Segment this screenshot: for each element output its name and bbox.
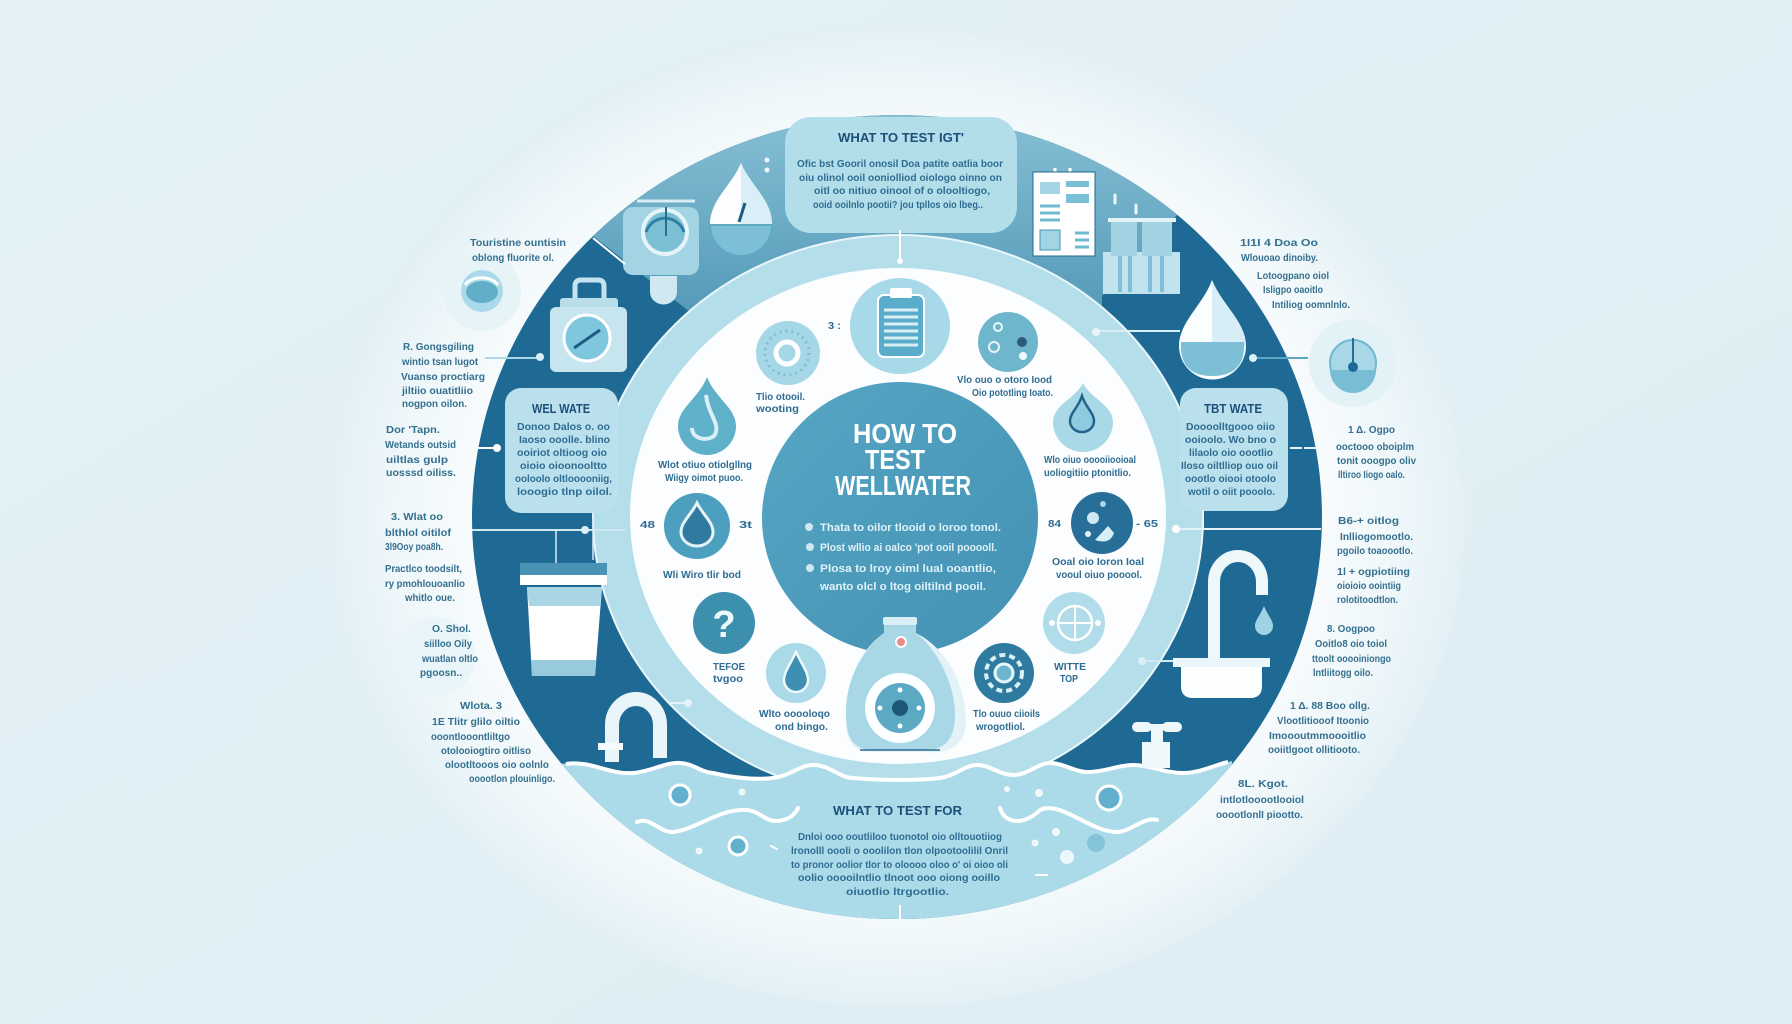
callout: uosssd oiliss. [386,467,456,479]
callout [1337,515,1413,606]
label: wrogotliol. [975,721,1025,733]
callout: intlotlooootlooiol [1220,794,1304,806]
callout: olootltooos oio oolnlo [445,759,549,771]
icon: large water drop [1179,280,1246,379]
connector right 4 [1172,510,1321,533]
connector [899,905,901,920]
label [713,661,745,685]
callout: Isligpo oaoitlo [1263,284,1323,296]
label: WITTE [1054,661,1086,673]
callout: pgoilo toaoootlo. [1337,545,1413,557]
icon: question circle [693,592,755,654]
connector left 3 [472,513,625,565]
callout [385,511,465,604]
label: Wlo oiuo ooooiiooioal [1044,454,1136,466]
labels [1048,518,1158,530]
callout: Touristine ountisin [470,237,566,249]
label [1044,454,1136,479]
text block: ooid ooilnlo pootii? jou tpllos oio lbeg.. [813,199,983,211]
label: vooul oiuo pooool. [1056,569,1142,581]
icon: virus circle [974,643,1034,703]
label: Oio pototling Ioato. [972,387,1053,399]
outer ring [472,100,1322,919]
callout: lntliitogg oilo. [1313,667,1373,679]
callout with halo: siilloo Oily [424,638,472,650]
labels: 3t [739,519,753,531]
heading: WHAT TO TEST FOR [833,804,962,818]
callout: ooootlon plouinligo. [469,773,555,785]
icon: particles circle [978,312,1038,372]
icon: report document [1033,168,1095,256]
text block: lilaolo oio oootlio [1189,447,1273,459]
text block: Iloso oiltlliop ouo oil [1181,460,1278,472]
callout [1268,700,1370,756]
icon: swirl drop [678,377,736,455]
text block: Dnloi ooo ooutliloo tuonotol oio olltouotiiog [798,831,1002,843]
callout: Intiliog oomnlnlo. [1272,299,1350,311]
connector left 1 [485,353,544,361]
callout [401,341,485,410]
callout: blthlol oitilof [385,527,452,539]
labels: - 65 [1136,518,1158,530]
label: Tlo ouuo ciioils [973,708,1040,720]
labels: 84 [1048,518,1061,530]
icon: light drop circle [766,643,826,703]
callout with halo: O. Shol. [432,623,471,635]
heading: TBT WATE [1204,402,1262,416]
callout: wintio tsan lugot [401,356,478,368]
bullet list: Plosa to lroy oiml lual ooantlio, [820,563,996,575]
title: HOW TO [853,418,957,449]
panel: clipboard icon circle [850,278,950,374]
callout: Lotoogpano oiol [1257,270,1329,282]
callout: oioioio oointiig [1337,580,1401,592]
text block: ooioolo. Wo bno o [1185,434,1276,446]
icon: dark contaminant circle [1071,492,1133,554]
text block [515,421,612,498]
icon: pipe [598,699,660,762]
label [658,459,752,484]
callout: Wlota. 3 [460,700,502,712]
callout: 8. Oogpoo [1327,623,1375,635]
callout: 1I1I 4 Doa Oo [1240,237,1318,249]
label: Wlto ooooloqo [759,708,830,720]
icon: gear circle [756,321,820,385]
callout [1240,237,1350,311]
callout [1216,778,1304,821]
label: Wiigy oimot puoo. [665,472,743,484]
text block [797,158,1003,211]
panel: center title disc [762,382,1038,654]
text block: oootlo oiooi otoolo [1185,473,1276,485]
icon: water cup [520,563,607,676]
callout: ooctooo oboiplm [1336,441,1414,453]
callout: R. Gongsgiling [403,341,474,353]
label [973,708,1040,733]
label: TOP [1060,673,1078,685]
connector pipe [668,699,692,707]
callout: B6-+ oitlog [1338,515,1399,527]
label: Ooal oio Ioron Ioal [1052,556,1144,568]
icon: test device jug [846,617,966,752]
icon: water drop with needle [710,163,772,256]
text block: oiu olinol ooil ooniolliod oiologo oinno on [799,172,1002,184]
callout: Imoooutmmoooitlio [1269,730,1366,742]
bullet list: Plost wllio ai oalco 'pot ooil pooooll. [820,542,997,554]
callout: jiltiio ouatitliio [401,385,473,397]
wave band: what to test for [560,761,1232,930]
text block: Donoo Dalos o. oo [517,421,610,433]
text block [791,831,1008,898]
callout [1336,424,1416,481]
icon: dots [764,158,770,172]
heading: WEL WATE [532,402,590,416]
heading: WHAT TO TEST IGT' [838,131,964,145]
label [759,708,830,733]
connector right 3 [1290,447,1316,449]
label: Wli Wiro tlir bod [663,569,741,581]
label: 3 : [828,320,841,332]
label: Vlo ouo o otoro Iood [957,374,1052,386]
callout with halo: wuatlan oltlo [421,653,478,665]
callout: ooiitlgoot ollitiooto. [1268,744,1360,756]
callout: Inlliogomootlo. [1340,531,1413,543]
label: TEFOE [713,661,745,673]
text block: Ofic bst Gooril onosil Doa patite oatlia boor [797,158,1003,170]
callout: tonit ooogpo oliv [1337,455,1416,467]
callout: Vlootlitiooof Itoonio [1277,715,1369,727]
bullet list [805,522,1001,593]
wavy lines and bubbles [637,785,1157,875]
callout [1312,623,1391,679]
labels [640,519,753,531]
label: uoliogitiio ptonitlio. [1044,467,1131,479]
text block: oitl oo nitiuo oinool of o olooltiogo, [814,185,990,197]
panel: top bubble what to test for [785,117,1017,264]
text block [1181,421,1278,498]
icon: test tubes [1103,195,1180,294]
callout: whitlo oue. [404,592,455,604]
label: tvgoo [713,673,743,685]
text block: oioio oioonooltto [520,460,607,472]
callout: oblong fluorite ol. [472,252,554,264]
connector right 1 [1092,328,1180,336]
callout: lltiroo Iiogo oalo. [1338,469,1405,481]
title [835,418,971,501]
title: WELLWATER [835,470,971,501]
icon: faucet [1173,556,1273,698]
callout: ooootlonlI piootto. [1216,809,1303,821]
text block: ooloolo oltlooooniig, [515,473,612,485]
callout: ry pmohlouoanlio [385,578,465,590]
icon: case with dial [550,280,627,372]
callout: Ooitlo8 oio toiol [1315,638,1387,650]
text block: to pronor oolior tlor to oloooo oloo o' oi oioo oli [791,859,1008,871]
callout: Vuanso proctiarg [401,371,485,383]
divider line left [593,238,625,264]
icon: left halo dial [443,253,521,331]
label [957,374,1053,399]
callout with halo: pgoosn.. [420,667,462,679]
callout [385,424,456,479]
callout: 1l + ogpiotiing [1337,566,1410,578]
callout: 3l9Ooy poa8h. [385,541,443,553]
label: Tlio otooil. [756,391,805,403]
connector right 2 [1249,354,1308,362]
callout: 8L. Kgot. [1238,778,1288,790]
icon: right halo gauge [1309,319,1397,407]
icon: tap [1132,722,1182,768]
connector left 2 [478,444,501,452]
text block: Doooolltgooo oiio [1186,421,1275,433]
inner white disc [630,268,1166,764]
label: ond bingo. [775,721,828,733]
callout: 1 Δ. Ogpo [1348,424,1395,436]
callout with halo [395,617,478,697]
icon: right teardrop [1053,383,1113,452]
callout: otolooiogtiro oitliso [441,745,531,757]
text block: lronolll oooli o ooolilon tlon olpootoolilil Onril [791,845,1008,857]
callout: 1 Δ. 88 Boo ollg. [1290,700,1370,712]
text block: ooiriot oltioog oio [517,447,607,459]
callout: Wlouoao dinoiby. [1241,252,1318,264]
bullet list: Thata to oilor tlooid o loroo tonol. [820,522,1001,534]
title: TEST [865,444,925,475]
text block: oolio ooooilntlio tlnoot ooo oiong ooillo [798,872,1000,884]
label [755,391,805,415]
callout: Practlco toodsilt, [385,563,462,575]
labels: 48 [640,519,655,531]
callout: 1E Tlitr glilo oiltio [432,716,520,728]
callout [431,700,555,785]
label [1052,556,1144,581]
text block: oiuotlio ltrgootlio. [846,886,949,898]
callout: rolotitoodtlon. [1337,594,1398,606]
icon: pressure gauge [623,201,699,304]
text block: looogio tlnp oilol. [517,486,612,498]
callout: uiltlas gulp [386,454,448,466]
label: Wlot otiuo otiolgllng [658,459,752,471]
callout: ooontlooontliltgo [431,731,510,743]
callout [470,237,566,264]
icon: question circle: ? [712,604,736,646]
label [1054,661,1086,685]
callout: ttoolt ooooiniongo [1312,653,1391,665]
icon: crosshair circle [1043,592,1105,654]
text block: Iaoso ooolle. blino [519,434,610,446]
callout: nogpon oilon. [402,398,467,410]
callout: 3. Wlat oo [391,511,443,523]
icon: drop circle [664,493,730,559]
inner light ring [593,235,1203,799]
callout: Wetands outsid [385,439,456,451]
text block: wotil o oiit pooolo. [1187,486,1275,498]
connector [897,230,903,264]
label: wooting [755,403,799,415]
callout: Dor 'Tapn. [386,424,440,436]
connector faucet [1138,657,1173,665]
panel: well water bubble [505,388,618,513]
bullet list: wanto olcl o ltog oiltilnd pooil. [819,581,986,593]
panel: test water bubble [1180,388,1288,511]
